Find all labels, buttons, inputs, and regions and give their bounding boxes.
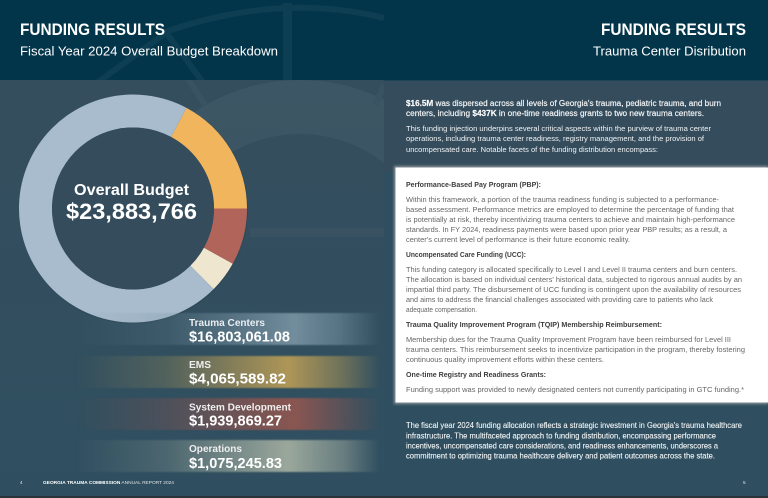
- panel: funding facets: [394, 166, 768, 404]
- facet: performance-based pay: Performance-Based Pay Program (PBP):: [406, 180, 541, 189]
- page number: right page: 5: [743, 480, 746, 485]
- facet: performance-based pay: is potentially at risk, thereby incentivizing trauma centers to achieve and maintain high-performance: [406, 215, 735, 224]
- facet: TQIP reimbursement: continuous quality improvement efforts within these centers.: [406, 355, 604, 364]
- facet: TQIP reimbursement: [406, 320, 745, 364]
- closing text: The fiscal year 2024 funding allocation reflects a strategic investment in Georgia's trauma healthcare: [406, 421, 742, 430]
- facet: one-time grants: One-time Registry and Readiness Grants:: [406, 370, 546, 379]
- legend band: EMS: [75, 356, 380, 388]
- closing text: incentives, uncompensated care considerations, and readiness enhancements, underscores a: [406, 442, 719, 450]
- facet: one-time grants: [406, 370, 744, 394]
- legend band: trauma centers: [75, 313, 380, 346]
- donut centre label: $23,883,766: [66, 199, 197, 224]
- facet: TQIP reimbursement: trauma centers. This reimbursement seeks to incentivize participation in the program, thereby fostering: [406, 345, 745, 354]
- intro text: uncompensated care. Notable facets of the funding distribution encompass:: [406, 145, 658, 154]
- legend band: operations: Operations: [189, 444, 242, 455]
- legend band: system development: [75, 398, 380, 430]
- watermark emblem: [96, 3, 384, 80]
- facet: TQIP reimbursement: Membership dues for the Trauma Quality Improvement Program have been reimbursed for Level III: [406, 335, 731, 344]
- facet: uncompensated care: Uncompensated Care Funding (UCC):: [406, 250, 526, 259]
- closing text: commitment to optimizing trauma healthcare delivery and patient outcomes across the state.: [406, 452, 715, 460]
- donut centre label: [66, 182, 197, 224]
- facet: uncompensated care: adequate compensation.: [406, 305, 477, 314]
- intro text: [406, 99, 721, 154]
- legend band: system development: $1,939,869.27: [189, 412, 282, 430]
- intro text: operations, including trauma center readiness, registry management, and the provision of: [406, 134, 705, 143]
- heading: right page: FUNDING RESULTS: [601, 21, 746, 39]
- facet: uncompensated care: This funding category is allocated specifically to Level I and Level II trauma centers and burn centers.: [406, 265, 737, 274]
- donut chart: overall budget: [19, 95, 248, 324]
- heading: left page: FUNDING RESULTS: [20, 21, 165, 39]
- heading: left page: [20, 21, 278, 58]
- facet: performance-based pay: based assessment. Performance metrics are employed to determine the percentage of funding that: [406, 205, 735, 214]
- facet: performance-based pay: [406, 180, 735, 244]
- heading: left page: Fiscal Year 2024 Overall Budget Breakdown: [20, 44, 278, 58]
- closing text: [406, 421, 742, 460]
- footer: left page: 4: [20, 480, 23, 485]
- legend band: operations: [75, 440, 380, 472]
- legend band: EMS: $4,065,589.82: [189, 370, 286, 388]
- facet: performance-based pay: Within this framework, a portion of the trauma readiness funding is subjected to a performance-: [406, 195, 719, 204]
- footer: left page: GEORGIA TRAUMA COMMISSION ANNUAL REPORT 2024: [43, 480, 174, 485]
- legend band: EMS: EMS: [189, 360, 211, 371]
- legend band: system development: System Development: [189, 402, 292, 414]
- heading: right page: [593, 21, 746, 58]
- facet: performance-based pay: center's current level of performance is their future economic reality.: [406, 235, 630, 244]
- heading: right page: Trauma Center Disribution: [593, 44, 746, 58]
- facet: uncompensated care: and aims to address the financial challenges associated with providing care to patients who lack: [406, 295, 713, 304]
- legend band: operations: $1,075,245.83: [189, 455, 282, 472]
- facet: uncompensated care: impartial third party. The disbursement of UCC funding is contingent upon the availability of resources: [406, 285, 741, 294]
- facet: TQIP reimbursement: Trauma Quality Improvement Program (TQIP) Membership Reimbursement:: [406, 320, 662, 329]
- intro text: This funding injection underpins several critical aspects within the purview of trauma center: [406, 124, 712, 133]
- legend band: trauma centers: Trauma Centers: [189, 318, 265, 329]
- intro text: $16.5M was dispersed across all levels of Georgia's trauma, pediatric trauma, and burn: [406, 99, 721, 108]
- intro text: centers, including $437K in one-time readiness grants to two new trauma centers.: [406, 109, 704, 118]
- closing text: infrastructure. The multifaceted approach to funding distribution, encompassing performance: [406, 432, 716, 440]
- donut centre label: Overall Budget: [74, 182, 190, 199]
- facet: performance-based pay: standards. In FY 2024, readiness payments were based upon prior year PBP results; as a result, a: [406, 225, 728, 234]
- facet: uncompensated care: [406, 250, 742, 314]
- facet: uncompensated care: The allocation is based on individual centers' historical data, subjected to rigorous annual audits by an: [406, 275, 742, 284]
- legend band: trauma centers: $16,803,061.08: [189, 328, 290, 346]
- facet: one-time grants: Funding support was provided to newly designated centers not currently participating in GTC funding.*: [406, 385, 744, 394]
